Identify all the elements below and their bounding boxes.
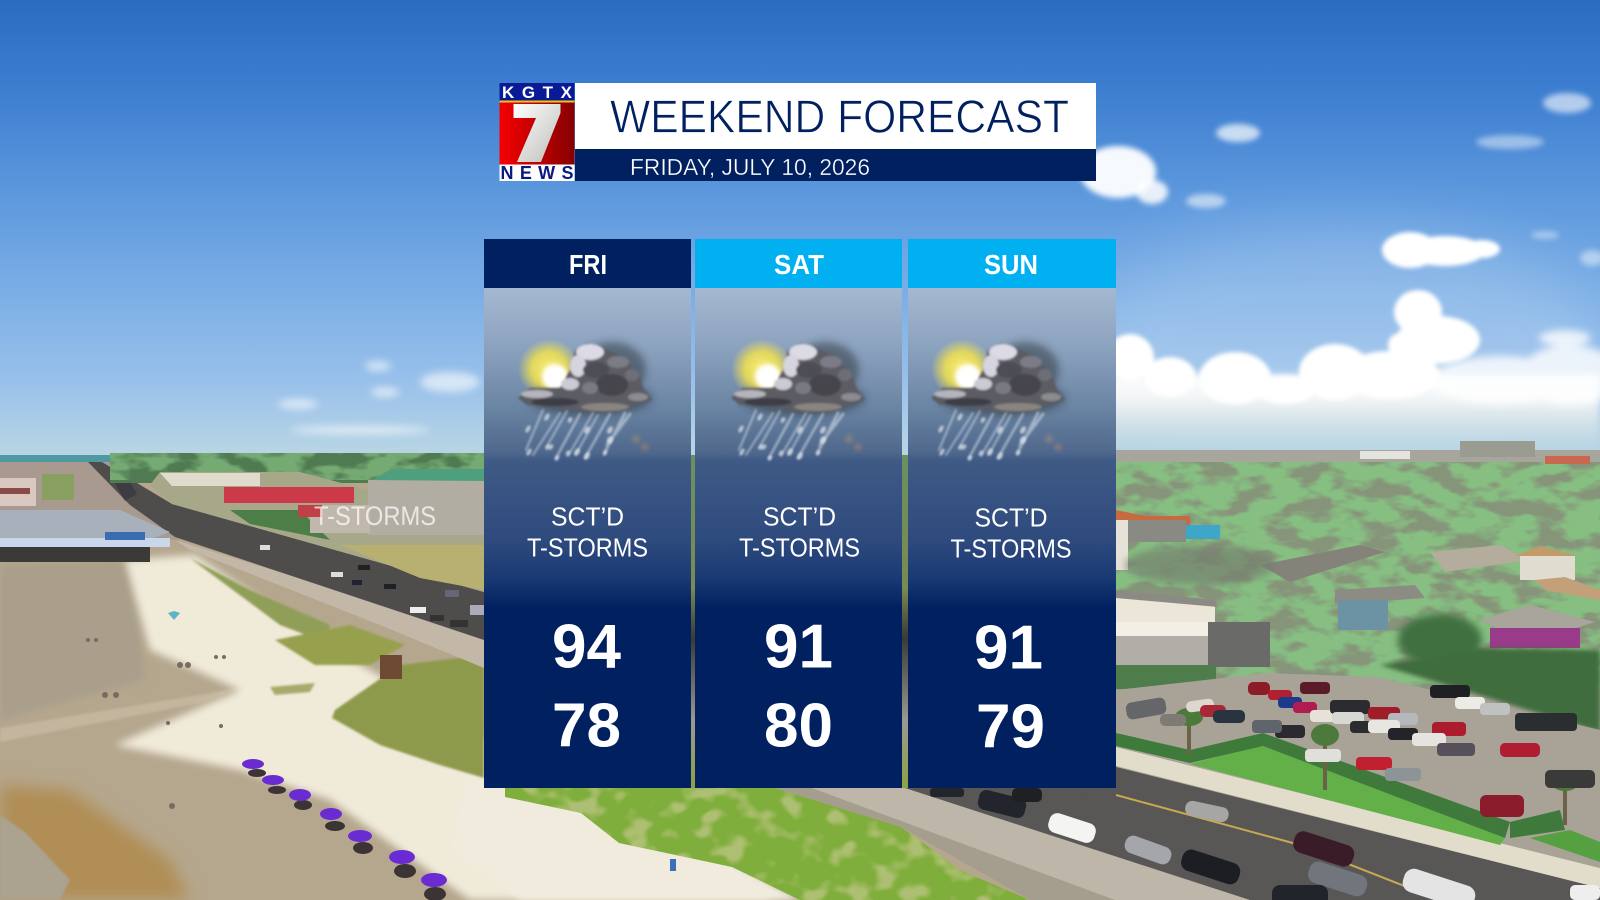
Sunday high: 91 [974, 614, 1043, 682]
Friday condition: T-STORMS [527, 532, 648, 562]
green-roofed hotel [298, 469, 484, 535]
Saturday low: 80 [764, 692, 833, 760]
left beach buildings and lawn [0, 478, 36, 506]
logo: KGTX 7 News: NEWS [500, 163, 574, 183]
road right [905, 788, 1600, 900]
lawn and hedges [1116, 733, 1600, 868]
gaps between panels [691, 455, 695, 788]
Friday condition: SCT’D [551, 502, 624, 532]
Saturday body [695, 288, 902, 788]
tree belt right [1380, 648, 1600, 732]
Saturday header [695, 239, 902, 288]
parked cars [1125, 682, 1595, 817]
water and wet sand [0, 560, 145, 720]
road cars [930, 788, 1600, 900]
date bar [575, 149, 1096, 181]
logo: KGTX 7 News: KGTX [502, 83, 573, 102]
Friday condition [527, 502, 648, 562]
cumulus band [1090, 290, 1600, 455]
city blocks left [110, 453, 484, 483]
Saturday header: SAT [774, 249, 824, 280]
date: FRIDAY, JULY 10, 2026 [630, 154, 870, 180]
Friday header [484, 239, 691, 288]
Saturday high: 91 [764, 612, 833, 682]
logo: KGTX 7 News [500, 83, 574, 183]
Saturday condition: T-STORMS [739, 532, 860, 562]
grass below panels [505, 788, 1035, 900]
Friday low: 78 [552, 692, 621, 760]
town right: neighbourhood [1100, 441, 1600, 690]
sidewalk [1116, 747, 1600, 888]
icon: sun behind thunderstorm cloud [518, 339, 652, 462]
seawall and promenade [175, 540, 484, 668]
Friday high: 94 [552, 612, 621, 682]
Sunday body [908, 288, 1116, 788]
title background [575, 83, 1096, 149]
Sunday condition [950, 502, 1072, 564]
red building [224, 487, 354, 503]
dune grass [190, 558, 484, 778]
icon: sun behind thunderstorm cloud [731, 339, 865, 462]
Sunday header: SUN [984, 249, 1038, 280]
panel: Friday [484, 239, 691, 788]
purple beach umbrellas [86, 611, 676, 900]
title: WEEKEND FORECAST [610, 90, 1069, 142]
palm trees [1175, 708, 1579, 825]
Saturday condition [739, 502, 860, 562]
white building right [1116, 590, 1270, 689]
Sunday condition: SCT’D [974, 502, 1048, 532]
Sunday condition: T-STORMS [950, 534, 1072, 564]
sea [0, 455, 120, 463]
land base [0, 462, 1600, 900]
Friday header: FRI [569, 249, 607, 280]
panel: Saturday [695, 239, 902, 788]
icon: sun behind thunderstorm cloud [931, 339, 1065, 462]
pier [0, 510, 170, 562]
road left [88, 462, 484, 640]
parking lot [1116, 673, 1600, 832]
panel: title banner [500, 83, 1096, 183]
Saturday condition: SCT’D [763, 502, 836, 532]
panel: Sunday [908, 239, 1116, 788]
clouds [278, 93, 1600, 455]
Friday body [484, 288, 691, 788]
dry sand [115, 555, 780, 900]
Sunday low: 79 [976, 692, 1045, 762]
stray condition label over background: T-STORMS [314, 501, 436, 531]
sky [0, 0, 1600, 470]
Sunday header [908, 239, 1116, 288]
boulevard cars [113, 473, 484, 627]
